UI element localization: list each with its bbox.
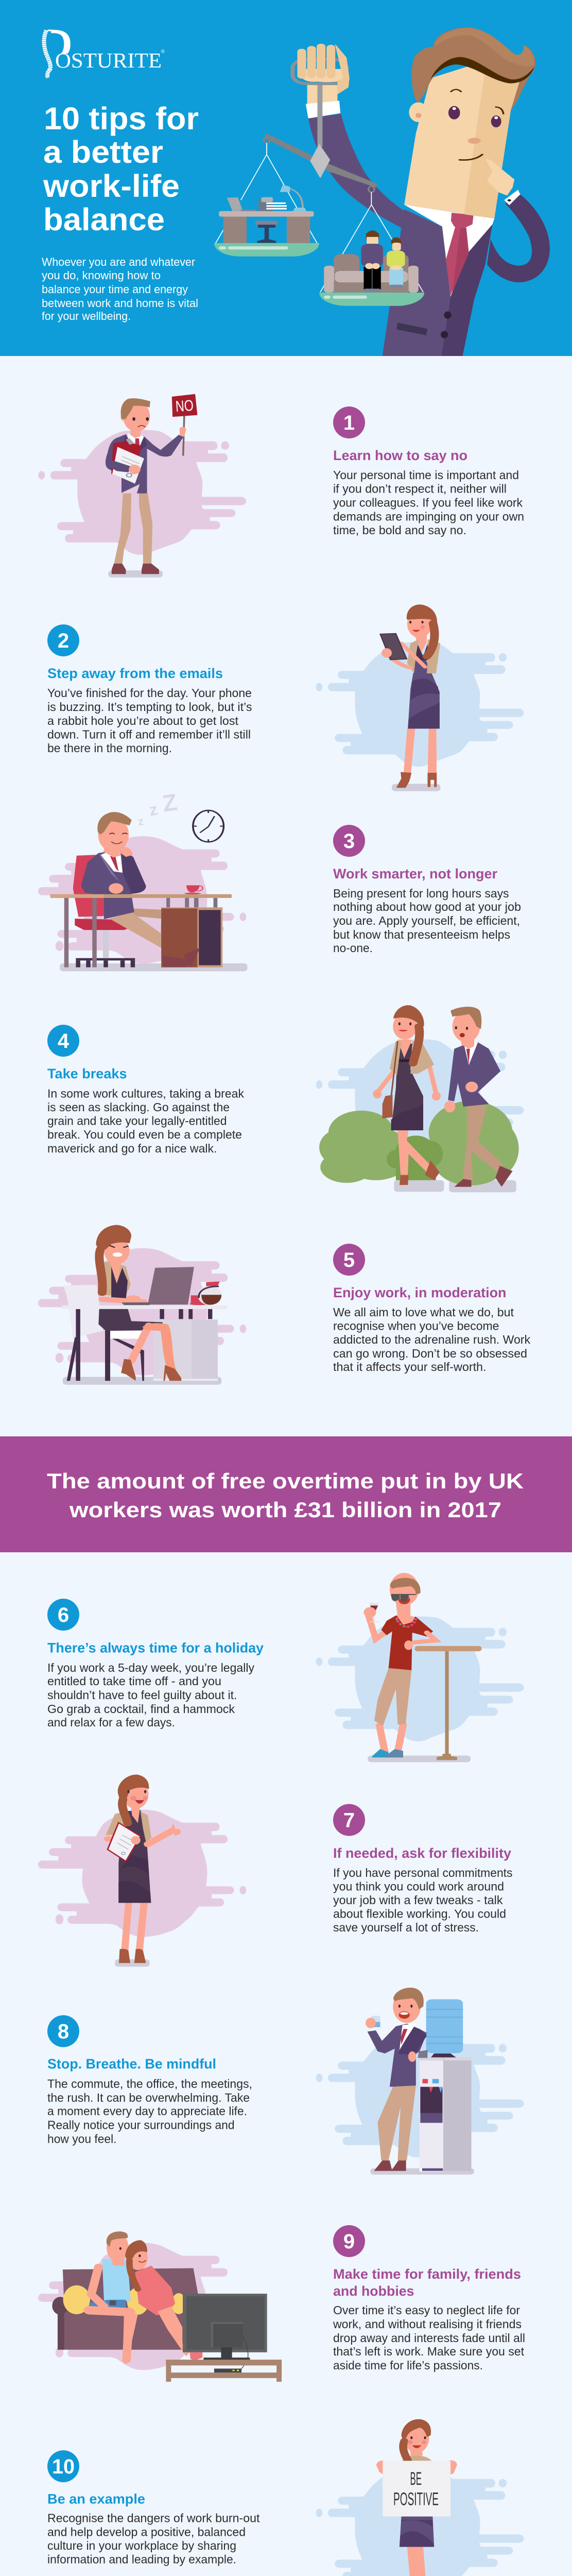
body text: culture in your workplace by sharing: [47, 2539, 236, 2552]
body text: if you don’t respect it, neither will: [333, 482, 507, 496]
sign text: BE POSITIVE: [393, 2469, 439, 2510]
body text: entitled to take time off - and you: [47, 1674, 221, 1688]
body text: You’ve finished for the day. Your phone: [47, 686, 252, 700]
sleeping Zs: Z: [161, 788, 179, 817]
body text: the rush. It can be overwhelming. Take: [47, 2091, 250, 2104]
body text: nothing about how good at your job: [333, 900, 521, 913]
panel: overtime statistic banner: [0, 1436, 572, 1552]
body text: [333, 887, 521, 955]
badge: number 4: [47, 1025, 79, 1057]
badge: number 2: 2: [58, 630, 69, 652]
tip 9: [38, 2225, 525, 2382]
body text: aside time for life’s passions.: [333, 2359, 483, 2372]
illustration: man at water cooler: [316, 1988, 524, 2175]
body text: time, be bold and say no.: [333, 523, 466, 537]
body text: [333, 468, 524, 537]
body text: you are. Apply yourself, be efficient,: [333, 914, 520, 927]
badge: number 6: [47, 1599, 79, 1631]
tip 7: [38, 1774, 512, 1967]
badge: number 4: 4: [58, 1030, 70, 1053]
body text: If you have personal commitments: [333, 1866, 513, 1879]
tip 8: [47, 1988, 524, 2175]
panel: overtime statistic banner: The amount of free overtime put in by UK: [47, 1469, 524, 1493]
body text: information and leading by example.: [47, 2552, 236, 2566]
body text: Recognise the dangers of work burn-out: [47, 2511, 260, 2524]
body text: [333, 1306, 531, 1374]
illustration: man dozing at desk: [38, 788, 247, 971]
intro text: you do, knowing how to: [42, 269, 161, 282]
badge: number 1: 1: [343, 412, 355, 434]
tip 4: [47, 1005, 524, 1192]
body text: is seen as slacking. Go against the: [47, 1100, 230, 1114]
title: 10 tips for: [44, 101, 199, 136]
badge: number 9: 9: [343, 2230, 355, 2253]
heading: Be an example: Be an example: [47, 2492, 145, 2507]
body text: [47, 1087, 244, 1155]
body text: grain and take your legally-entitled: [47, 1114, 227, 1127]
body text: a moment every day to appreciate life.: [47, 2104, 247, 2117]
logo: Posturite: [42, 29, 165, 78]
logo: Posturite: P: [36, 12, 73, 94]
body text: shouldn’t have to feel guilty about it.: [47, 1688, 237, 1702]
heading: Enjoy work, in moderation: Enjoy work, in moderation: [333, 1285, 507, 1300]
panel: header: [0, 0, 572, 356]
badge: number 2: [47, 624, 79, 656]
illustration: man holding NO sign: NO: [175, 397, 194, 415]
badge: number 5: 5: [343, 1249, 355, 1272]
badge: number 5: [333, 1244, 365, 1276]
body text: be there in the morning.: [47, 741, 172, 755]
body text: down. Turn it off and remember it’ll still: [47, 727, 251, 741]
body text: you think you could work around: [333, 1879, 504, 1893]
body text: In some work cultures, taking a break: [47, 1087, 244, 1100]
body text: [47, 686, 252, 755]
panel: overtime statistic banner: workers was worth £31 billion in 2017: [69, 1498, 501, 1522]
badge: number 9: [333, 2225, 365, 2257]
body text: your job with a few tweaks - talk: [333, 1893, 503, 1907]
badge: number 10: 10: [52, 2455, 75, 2478]
body text: demands are impinging on your own: [333, 510, 524, 523]
logo: Posturite: ®: [161, 48, 165, 55]
body text: [47, 2077, 252, 2145]
heading: Step away from the emails: Step away from the emails: [47, 666, 223, 681]
badge: number 8: 8: [58, 2021, 69, 2043]
illustration: businessman holding scales: [214, 27, 550, 356]
illustration: man holding NO sign: [38, 394, 246, 578]
tip 1: [38, 394, 524, 578]
body text: and relax for a few days.: [47, 1716, 175, 1729]
body text: and help develop a positive, balanced: [47, 2526, 246, 2539]
sign text: BE POSITIVE: POSITIVE: [393, 2489, 439, 2510]
body text: maverick and go for a nice walk.: [47, 1142, 217, 1155]
body text: [47, 2511, 260, 2566]
badge: number 7: 7: [343, 1809, 355, 1832]
badge: number 1: [333, 406, 365, 438]
tip 10: [47, 2419, 524, 2576]
body text: [333, 1866, 513, 1934]
sign text: BE POSITIVE: BE: [410, 2469, 422, 2489]
illustration: man on holiday at bar table: [316, 1573, 524, 1762]
title: a better: [43, 134, 163, 170]
body text: [47, 1661, 254, 1729]
badge: number 8: [47, 2015, 79, 2047]
heading: Make time for family, friends and hobbies: [333, 2266, 521, 2299]
body text: break. You could even be a complete: [47, 1128, 242, 1141]
title: work-life: [43, 168, 180, 204]
body text: We all aim to love what we do, but: [333, 1306, 514, 1319]
title: [43, 101, 199, 237]
badge: number 6: 6: [58, 1604, 69, 1626]
body text: recognise when you’ve become: [333, 1319, 499, 1332]
intro text: balance your time and energy: [42, 283, 188, 296]
body text: Really notice your surroundings and: [47, 2119, 235, 2132]
badge: number 10: [47, 2450, 79, 2482]
body text: can go wrong. Don’t be so obsessed: [333, 1347, 527, 1360]
sleeping Zs: z: [137, 815, 145, 828]
heading: Work smarter, not longer: Work smarter, not longer: [333, 866, 497, 882]
body text: The commute, the office, the meetings,: [47, 2077, 252, 2091]
heading: Learn how to say no: Learn how to say no: [333, 448, 467, 463]
tip 5: [38, 1225, 531, 1385]
intro text: between work and home is vital: [42, 297, 198, 310]
sleeping Zs: [137, 788, 179, 828]
tip 6: [47, 1573, 524, 1762]
body text: a rabbit hole you’re about to get lost: [47, 714, 239, 727]
body text: Go grab a cocktail, find a hammock: [47, 1702, 235, 1716]
illustration: stressed woman at laptop: [38, 1225, 246, 1385]
logo: Posturite: OSTURITE: [55, 48, 162, 72]
illustration: couple on sofa watching TV: [38, 2231, 282, 2382]
body text: Your personal time is important and: [333, 468, 519, 482]
body text: Being present for long hours says: [333, 887, 509, 900]
body text: Over time it’s easy to neglect life for: [333, 2303, 520, 2317]
sleeping Zs: z: [148, 800, 159, 819]
body text: about flexible working. You could: [333, 1907, 506, 1921]
body text: your colleagues. If you feel like work: [333, 496, 523, 509]
heading: Make time for family, friends and hobbies: Make time for family, friends: [333, 2266, 521, 2282]
intro text: for your wellbeing.: [42, 310, 131, 323]
heading: Take breaks: Take breaks: [47, 1066, 127, 1081]
body text: addicted to the adrenaline rush. Work: [333, 1333, 531, 1346]
body text: save yourself a lot of stress.: [333, 1921, 479, 1934]
badge: number 7: [333, 1804, 365, 1836]
body text: no-one.: [333, 941, 373, 955]
tip 2: [47, 604, 524, 791]
body text: work, and without realising it friends: [333, 2317, 522, 2331]
body text: is buzzing. It’s tempting to look, but it’s: [47, 700, 252, 714]
badge: number 3: [333, 825, 365, 857]
illustration: woman with tablet: [316, 604, 524, 791]
intro text: [42, 256, 198, 323]
heading: If needed, ask for flexibility: If needed, ask for flexibility: [333, 1845, 511, 1861]
body text: that’s left is work. Make sure you set: [333, 2345, 525, 2358]
body text: how you feel.: [47, 2132, 116, 2145]
heading: Make time for family, friends and hobbies: and hobbies: [333, 2283, 414, 2299]
tip 3: [38, 788, 521, 971]
body text: that it affects your self-worth.: [333, 1360, 486, 1374]
body text: drop away and interests fade until all: [333, 2331, 525, 2345]
body text: but know that presenteeism helps: [333, 928, 510, 941]
illustration: woman holding Be Positive sign: [316, 2419, 524, 2576]
heading: There's always time for a holiday: There’s always time for a holiday: [47, 1640, 264, 1656]
illustration: couple walking among bushes: [316, 1005, 524, 1192]
body text: If you work a 5-day week, you’re legally: [47, 1661, 254, 1674]
title: balance: [43, 202, 165, 237]
badge: number 3: 3: [343, 830, 355, 853]
body text: [333, 2303, 525, 2372]
illustration: woman thumbs up with clipboard: [38, 1774, 246, 1967]
intro text: Whoever you are and whatever: [42, 256, 195, 268]
heading: Stop. Breathe. Be mindful: Stop. Breathe. Be mindful: [47, 2056, 216, 2072]
